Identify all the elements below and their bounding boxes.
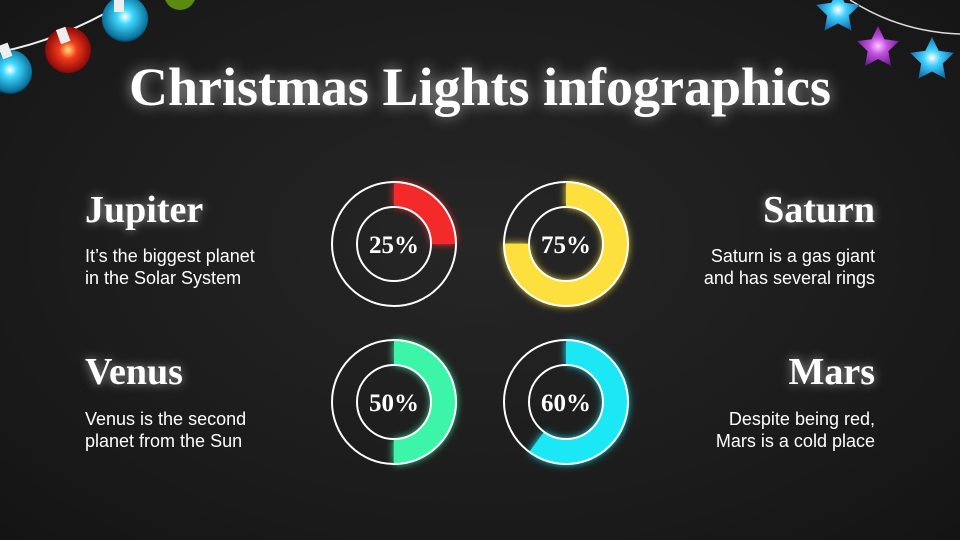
title: Christmas Lights infographics — [129, 57, 831, 117]
panel: Mars — [716, 351, 880, 451]
panel: Jupiter — [84, 189, 255, 288]
panel: Saturn — [704, 189, 880, 288]
panel: Venus: Venus is the second — [85, 409, 246, 429]
string: left lights — [0, 0, 196, 94]
panel: Mars: Mars is a cold place — [716, 431, 875, 451]
chart: 25% — [332, 182, 456, 306]
panel: Jupiter: Jupiter — [85, 189, 203, 231]
chart: 75% — [504, 182, 628, 306]
chart: 60% — [504, 340, 628, 464]
chart: 25%: 25% — [369, 232, 419, 259]
panel: Venus — [82, 351, 246, 451]
chart: 75%: 75% — [541, 232, 591, 259]
panel: Venus: planet from the Sun — [85, 431, 242, 451]
panel: Venus: Venus — [85, 351, 183, 393]
chart: 50%: 50% — [369, 390, 419, 417]
string: right stars — [816, 0, 960, 79]
panel: Mars: Mars — [788, 351, 875, 393]
panel: Mars: Despite being red, — [729, 409, 875, 429]
chart: 60%: 60% — [541, 390, 591, 417]
panel: Jupiter: It’s the biggest planet — [85, 246, 255, 266]
panel: Saturn: Saturn is a gas giant — [711, 246, 875, 266]
panel: Saturn: and has several rings — [704, 268, 875, 288]
panel: Jupiter: in the Solar System — [85, 268, 241, 288]
chart: 50% — [332, 340, 456, 464]
panel: Saturn: Saturn — [763, 189, 875, 231]
